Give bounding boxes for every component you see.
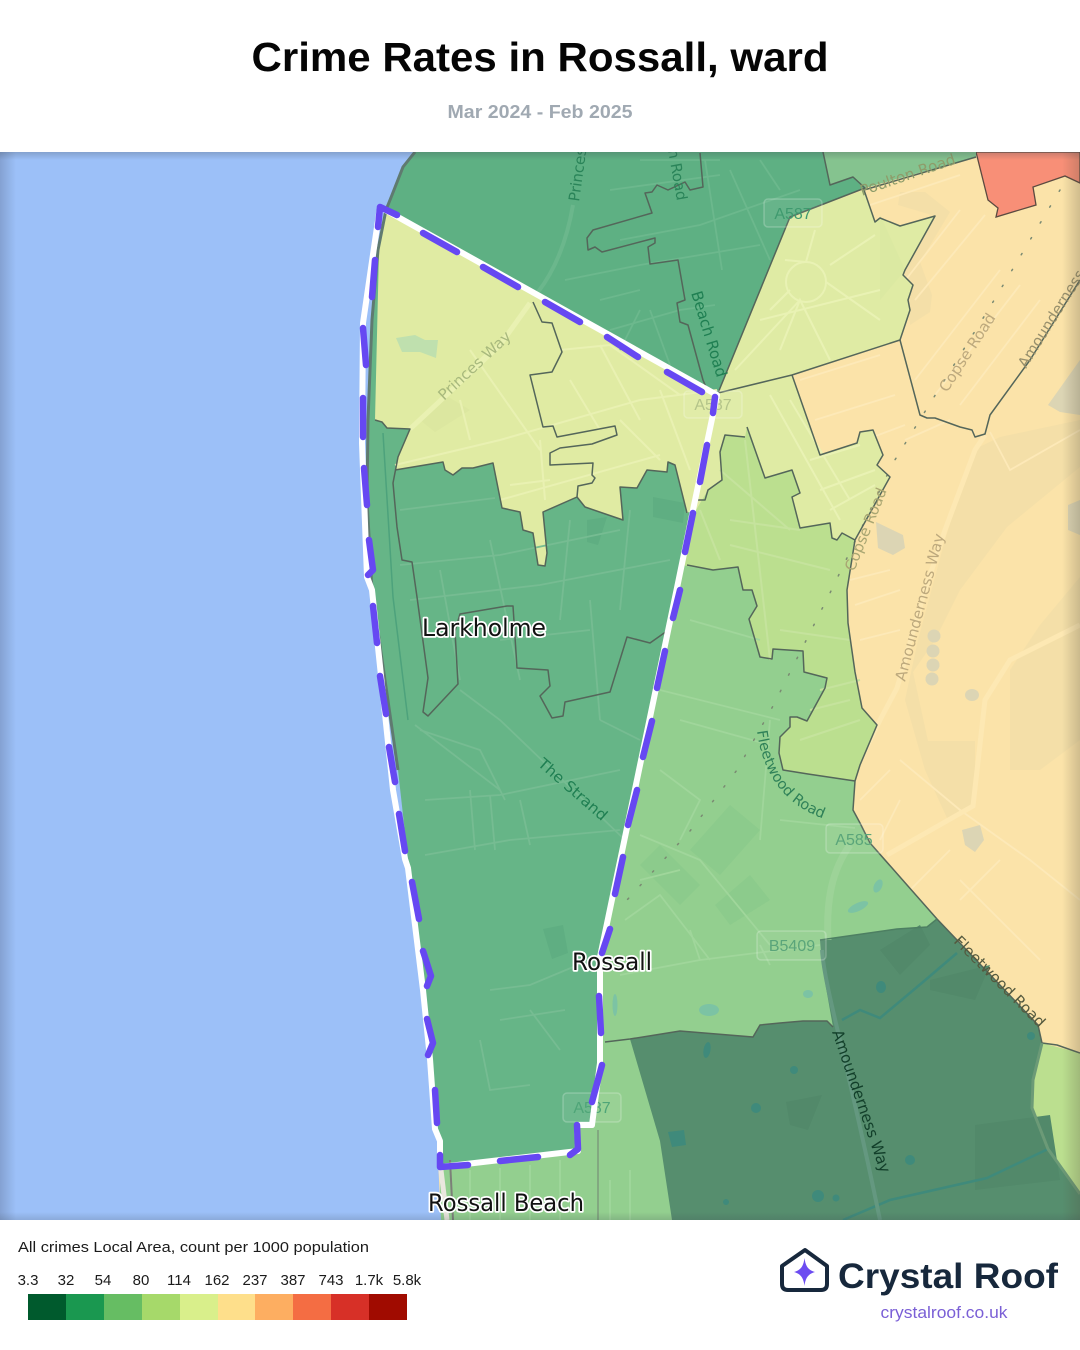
map: wide edge of dark zone	[1032, 1043, 1080, 1194]
map: green zone north of ward	[380, 152, 865, 393]
legend colour scale	[28, 1294, 407, 1320]
legend tick labels: 1.7k	[355, 1272, 384, 1289]
legend tick labels: 743	[318, 1272, 344, 1289]
map: Princes Way road south part	[410, 303, 530, 429]
road badge: B5409	[757, 931, 826, 960]
legend tick labels: 3.3	[18, 1272, 38, 1289]
map: yellow-green zone north-east	[718, 190, 935, 393]
title: Crime Rates in Rossall, ward	[252, 34, 828, 80]
map: teal coastal line	[383, 433, 408, 720]
map: beach strip	[441, 1170, 447, 1220]
map: roads on north green	[565, 160, 800, 365]
map: roads on ward green	[400, 498, 670, 1090]
road label: n Road: n Road	[664, 148, 691, 202]
legend title: All crimes Local Area, count per 1000 population	[18, 1239, 369, 1256]
map: light green zone north	[823, 152, 976, 188]
legend tick labels: 162	[204, 1272, 230, 1289]
map: roads on peach area	[800, 175, 1080, 1000]
place label: Larkholme: Larkholme	[422, 614, 546, 642]
road label: Poulton Road: Poulton Road	[857, 150, 958, 200]
road label: Beach Road: Beach Road	[687, 289, 730, 379]
map: darker fields on peach area	[898, 192, 1080, 818]
logo wordmark: Crystal Roof	[838, 1257, 1058, 1296]
place label: Rossall Beach: Rossall Beach	[428, 1189, 584, 1217]
map: streams	[842, 953, 1048, 1220]
map: roads on yellow area	[395, 345, 717, 500]
road badge: A585	[826, 824, 883, 853]
road badge: A587 centre	[684, 391, 742, 418]
map: yellow-green zone east	[696, 376, 889, 539]
road badge: A587 north	[764, 199, 822, 227]
icon: house outline	[782, 1250, 827, 1290]
icon: purple sparkle	[794, 1258, 815, 1286]
logo: Crystal Roof	[782, 1250, 1058, 1322]
map: Rossall ward yellow area	[375, 207, 717, 566]
road label: Princes Way: Princes Way	[434, 327, 515, 404]
road label: Copse Road north: Copse Road	[935, 310, 999, 395]
map: main peach road Amounderness Way	[853, 435, 1080, 855]
legend tick labels	[18, 1272, 422, 1289]
road badge: A585: A585	[835, 832, 873, 849]
map: boundary inside yellow area	[395, 302, 617, 566]
map edge vignette	[0, 152, 1080, 1220]
road badge: B5409: B5409	[769, 938, 815, 955]
road label: The Strand: The Strand	[534, 754, 611, 824]
legend tick labels: 387	[280, 1272, 306, 1289]
ward boundary: white line	[362, 207, 717, 1167]
map: roads on mid green	[700, 440, 860, 740]
road badge: A587 south	[563, 1093, 621, 1122]
map: coastline	[367, 152, 415, 770]
legend tick labels: 5.8k	[393, 1272, 422, 1289]
map: Rossall ward green area	[368, 256, 690, 1164]
legend tick labels: 237	[242, 1272, 268, 1289]
road label: Copse Road south: Copse Road	[841, 485, 891, 573]
map: dark green low-crime zone	[630, 919, 1080, 1220]
ward boundary: purple dashes	[363, 207, 715, 1167]
map: red high-crime zone	[976, 152, 1080, 217]
map: peach high-crime base area	[438, 155, 1080, 1193]
map: water features	[612, 878, 885, 1016]
map: light green zone south-east	[590, 565, 937, 1220]
map: ward sub-boundary lines	[375, 152, 1080, 1220]
map: roads on light green	[470, 620, 855, 1220]
road badge: A587 north: A587	[774, 206, 812, 223]
map: field patches in dark green zone	[917, 925, 1057, 1159]
logo url: crystalroof.co.uk	[880, 1304, 1008, 1322]
legend tick labels: 80	[133, 1272, 149, 1289]
road label: Amounderness Way south: Amounderness Way	[828, 1027, 894, 1175]
map: bottom-right mid green zone	[1032, 1043, 1080, 1194]
map: roads on north-east yellow zone	[735, 230, 880, 520]
road label: Fleetwood Road east: Fleetwood Road	[950, 932, 1049, 1031]
legend tick labels: 114	[167, 1272, 191, 1289]
legend tick labels: 32	[58, 1272, 74, 1289]
map: water in dark green zone	[668, 976, 1035, 1205]
legend tick labels: 54	[95, 1272, 111, 1289]
map: mid green zone east	[680, 427, 877, 781]
map: sea	[0, 152, 441, 1220]
map: light green zone below ward	[440, 1128, 590, 1220]
road label: Princes (north): Princes	[565, 146, 590, 203]
map: wide road through dark zone	[822, 950, 880, 1220]
road badge: A587 south: A587	[573, 1100, 611, 1117]
legend panel	[18, 1239, 422, 1320]
road label: Fleetwood Road curved: Fleetwood Road	[757, 730, 826, 818]
map: fields and pond details	[396, 215, 905, 959]
map: Princes Way road north part	[538, 205, 573, 292]
subtitle: date range: Mar 2024 - Feb 2025	[448, 101, 632, 122]
road badge: A587 centre: A587	[694, 397, 732, 414]
road label: Amounderness Way north: Amounderness Way	[891, 531, 948, 683]
map: dotted tram line	[627, 190, 1060, 900]
map panel	[0, 152, 1080, 1220]
map: faint A585 road	[828, 845, 850, 940]
map: grey blobs on peach area	[876, 360, 1080, 852]
place label: Rossall: Rossall	[572, 948, 652, 976]
